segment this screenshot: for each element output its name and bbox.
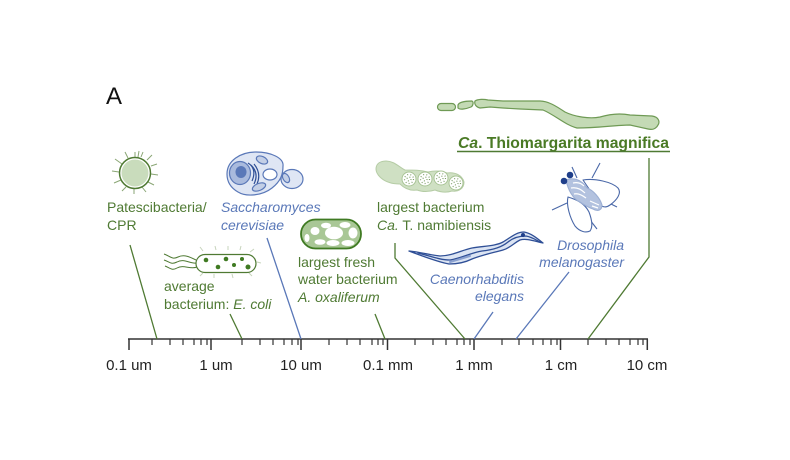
axis labels: 1 um (199, 357, 233, 374)
icon: Drosophila fly (552, 163, 619, 232)
leader lines (130, 158, 649, 339)
label: Patescibacteria: Patescibacteria/ (107, 199, 207, 215)
panel letter A: A (106, 83, 122, 110)
icon: E. coli (164, 246, 261, 278)
label: largest bacterium: T. namibiensis (399, 217, 491, 233)
axis labels: 10 cm (627, 357, 667, 374)
label: largest fresh water bacterium: largest fresh (298, 254, 375, 270)
label: average bacterium E. coli: E. coli (233, 296, 272, 312)
scale axis (128, 339, 648, 350)
icon: C. elegans worm (409, 232, 543, 264)
label: largest bacterium: largest bacterium (377, 199, 484, 215)
label: average bacterium E. coli: bacterium: (164, 296, 233, 312)
icon: Ca. Thiomargarita magnifica filament (438, 99, 659, 129)
axis labels (106, 357, 667, 374)
label: Caenorhabditis elegans: Caenorhabditis (430, 271, 524, 287)
label: largest bacterium: Ca. (377, 217, 399, 233)
axis labels: 1 cm (545, 357, 577, 374)
label: Caenorhabditis elegans: elegans (475, 288, 524, 304)
label: Saccharomyces cerevisiae: cerevisiae (221, 217, 284, 233)
axis labels: 0.1 mm (363, 357, 413, 374)
icon: Achromatium oxaliferum (301, 220, 361, 248)
axis labels: 0.1 um (106, 357, 152, 374)
axis labels: 10 um (280, 357, 322, 374)
label: Drosophila melanogaster: Drosophila (557, 237, 624, 253)
label: largest fresh water bacterium: water bacterium (297, 271, 398, 287)
label: Patescibacteria: CPR (107, 217, 137, 233)
icon: Ca. T. namibiensis (376, 161, 464, 192)
label: Ca. Thiomargarita magnifica: Ca. Thiomargarita magnifica (458, 135, 669, 152)
label: largest fresh water bacterium: A. oxaliferum (297, 289, 380, 305)
label: Drosophila melanogaster: melanogaster (539, 254, 625, 270)
label: average bacterium E. coli: average (164, 278, 215, 294)
label: Saccharomyces cerevisiae: Saccharomyces (221, 199, 321, 215)
icon: yeast cell (227, 152, 303, 195)
icon: Patescibacteria cell (112, 151, 158, 194)
axis labels: 1 mm (455, 357, 493, 374)
